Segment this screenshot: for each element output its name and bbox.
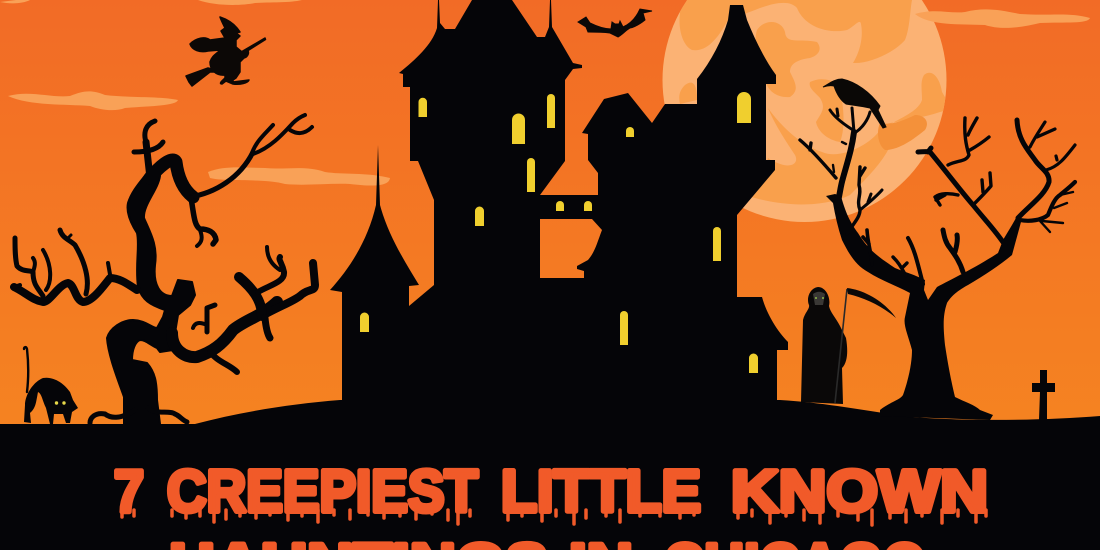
- castle silhouette: [330, 0, 788, 410]
- ground: [0, 400, 1100, 430]
- title paint drips: [122, 510, 986, 525]
- moon: [655, 0, 948, 222]
- castle windows: [360, 92, 758, 373]
- title line one: 7: [114, 458, 144, 524]
- right bare tree with moon branches: [800, 108, 1075, 420]
- sky background: [0, 0, 1100, 430]
- title line one: LITTLE: [501, 458, 701, 524]
- title: [114, 458, 988, 550]
- bat: [578, 9, 652, 37]
- clouds: [0, 0, 1090, 186]
- left bare tree: [14, 115, 315, 424]
- title line two: [170, 540, 922, 550]
- title line one: KNOWN: [731, 458, 988, 524]
- cat: [24, 347, 78, 424]
- crow: [823, 79, 886, 128]
- title line one: [114, 467, 986, 514]
- title line one: CREEPIEST: [167, 458, 478, 524]
- witch on broomstick: [186, 17, 266, 86]
- grave cross: [1032, 370, 1055, 420]
- grim reaper with scythe: [801, 287, 896, 404]
